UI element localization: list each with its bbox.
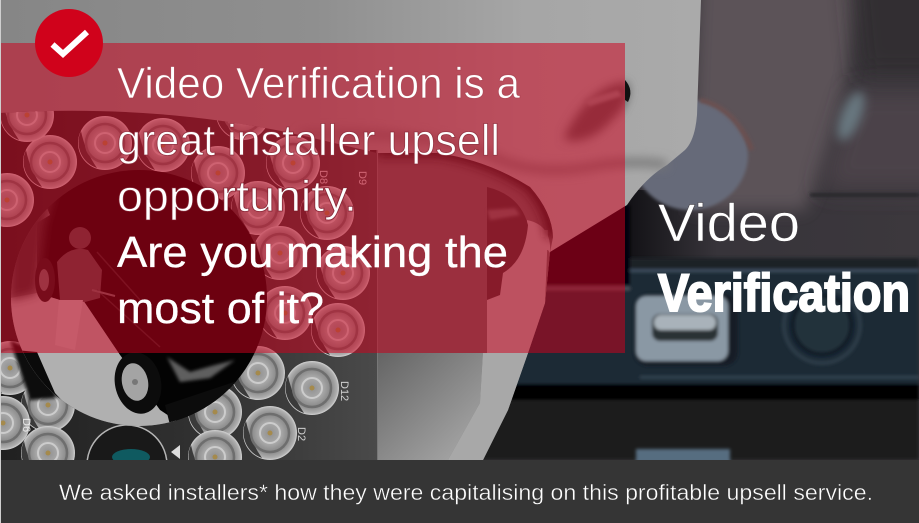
PCB labels: D2 [295,427,307,441]
person [57,227,102,302]
car wheel near [114,353,161,414]
camera lens with car reflection [11,170,267,426]
title: Video Verification: Video [658,194,800,253]
icon: device switch [634,294,738,366]
footer bar [0,460,919,523]
PCB labels: D12 [338,381,350,401]
car wheel far [35,258,55,302]
headline [117,59,521,333]
headline: opportunity. [117,172,357,221]
dome interior [377,153,553,460]
camera body [0,0,701,460]
LED board [1,110,377,460]
headline: great installer upsell [117,116,500,165]
headline: Video Verification is a [117,59,521,108]
PCB labels [20,170,368,441]
PCB labels: D6 [20,418,32,432]
PCB labels: D8 [317,170,329,184]
footer text: We asked installers* how they were capitalising on this profitable upsell service. [59,480,873,505]
red overlay panel [0,43,625,353]
icon: device round button [784,287,860,363]
icon: red check badge [35,9,103,77]
dimple on camera [565,82,629,141]
headline: most of it? [117,284,324,333]
PCB labels: D9 [356,171,368,185]
headline: Are you making the [117,228,508,277]
title: Video Verification [658,194,910,323]
dome lens slit [487,187,528,300]
background photo: finger and device [470,0,919,463]
